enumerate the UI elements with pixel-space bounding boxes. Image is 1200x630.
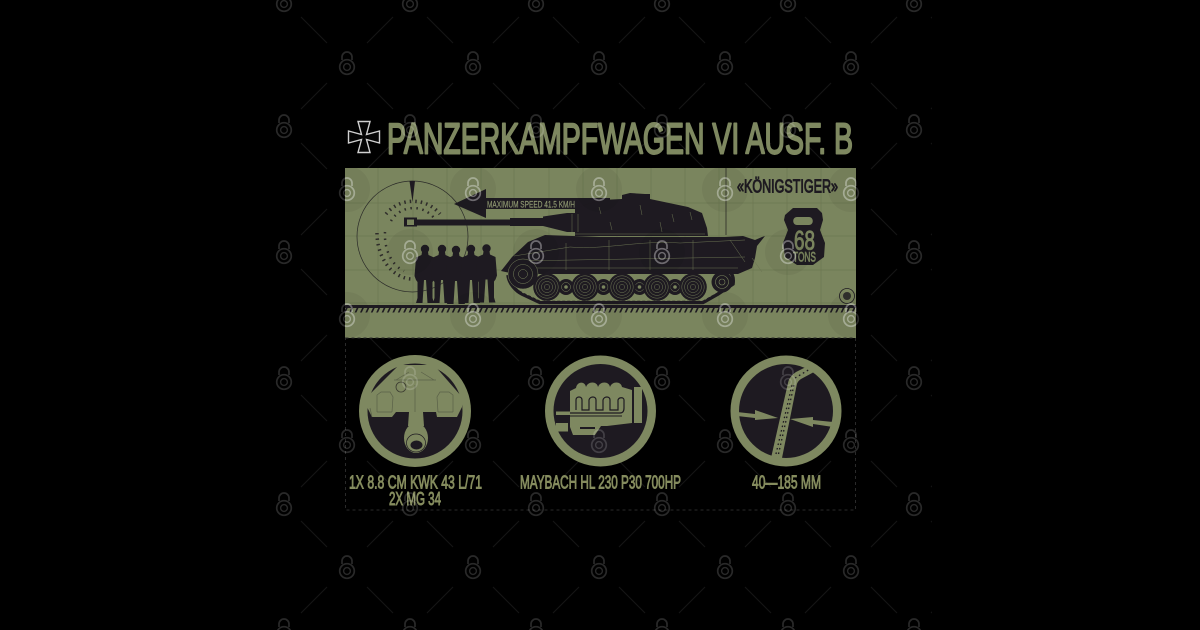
vertical marker line — [725, 168, 727, 235]
weight value: 68 — [794, 226, 815, 256]
gun barrel — [404, 213, 575, 232]
hull and turret detail lines — [514, 205, 762, 272]
label: engine: MAYBACH HL 230 P30 700HP — [520, 472, 681, 492]
icon: kettlebell weight — [783, 208, 825, 265]
track guards — [370, 372, 453, 417]
icon: armament front view — [359, 355, 471, 467]
tank silhouette — [404, 193, 765, 302]
range dial — [357, 181, 468, 292]
crew silhouettes — [414, 244, 497, 304]
label: machine guns: 2X MG 34 — [389, 489, 441, 509]
hull — [501, 235, 765, 274]
watermark locks — [268, 0, 932, 630]
engine block — [570, 382, 632, 435]
sump slot — [580, 427, 595, 429]
arrow right — [790, 417, 833, 427]
muzzle — [404, 423, 428, 453]
accessory box — [556, 423, 568, 432]
road wheels — [533, 273, 707, 301]
lower frame — [346, 338, 856, 510]
track — [508, 271, 733, 302]
arrow left — [737, 410, 778, 420]
manifold — [556, 397, 624, 416]
turret — [575, 193, 708, 236]
iron cross emblem — [348, 122, 380, 152]
watermark locks over panel — [345, 177, 856, 327]
hull front — [367, 365, 462, 417]
weight unit: TONS — [793, 250, 816, 264]
subtitle: Königstiger: «KÖNIGSTIGER» — [737, 176, 838, 196]
blueprint grid — [345, 168, 856, 305]
idler — [712, 272, 732, 292]
label: armor: 40—185 MM — [752, 472, 821, 492]
ground line — [345, 305, 856, 310]
panel: tank profile — [345, 168, 856, 338]
gun barrel — [408, 412, 424, 426]
title: PANZERKAMPFWAGEN VI AUSF. B — [387, 114, 853, 164]
flywheel — [634, 387, 642, 423]
drive sprocket — [508, 259, 538, 289]
speed label: MAXIMUM SPEED 41.5 KM/H — [487, 200, 575, 210]
icon: small badge — [840, 288, 854, 304]
icon: armor thickness — [730, 356, 842, 466]
inner road wheels — [558, 279, 683, 295]
armor plate — [771, 366, 814, 458]
label: armament: 1X 8.8 CM KWK 43 L/71 — [349, 472, 482, 492]
icon: engine — [545, 356, 656, 466]
panel background — [345, 168, 856, 338]
speed arrow — [454, 189, 610, 218]
watermark lattice lines — [268, 0, 932, 630]
